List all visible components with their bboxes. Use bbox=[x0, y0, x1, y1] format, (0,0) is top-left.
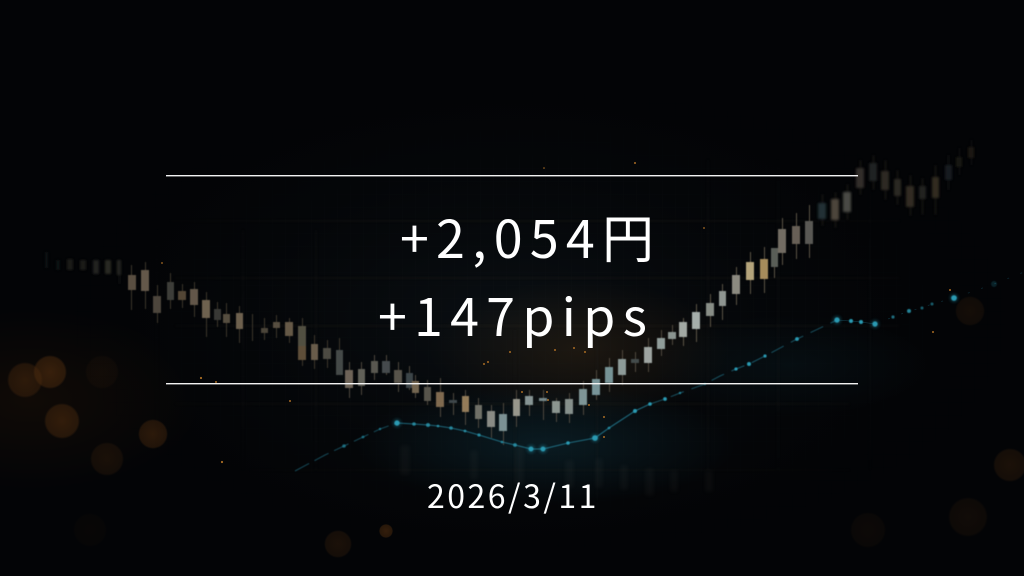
top rule bbox=[166, 175, 858, 176]
blue trend line: data points bbox=[342, 281, 997, 451]
blue trend line: glow bbox=[393, 294, 958, 453]
amount in yen: +2,054円 bbox=[400, 198, 661, 273]
date: 2026/3/11 bbox=[427, 472, 599, 518]
bokeh lights bbox=[7, 296, 1024, 558]
candles: rally section bbox=[679, 205, 813, 346]
candles: upper right, fading bbox=[818, 140, 974, 228]
candles: valley section bbox=[345, 325, 676, 445]
sparks bbox=[161, 162, 951, 463]
candles: left descending section bbox=[128, 262, 343, 375]
candles: far left, faint bbox=[45, 252, 121, 284]
background bbox=[0, 220, 858, 494]
bottom rule bbox=[166, 383, 858, 384]
blue trend line bbox=[295, 272, 1024, 471]
reflection beneath chart bbox=[400, 445, 713, 496]
pips gained: +147pips bbox=[378, 276, 654, 351]
candlestick chart bbox=[45, 140, 974, 445]
